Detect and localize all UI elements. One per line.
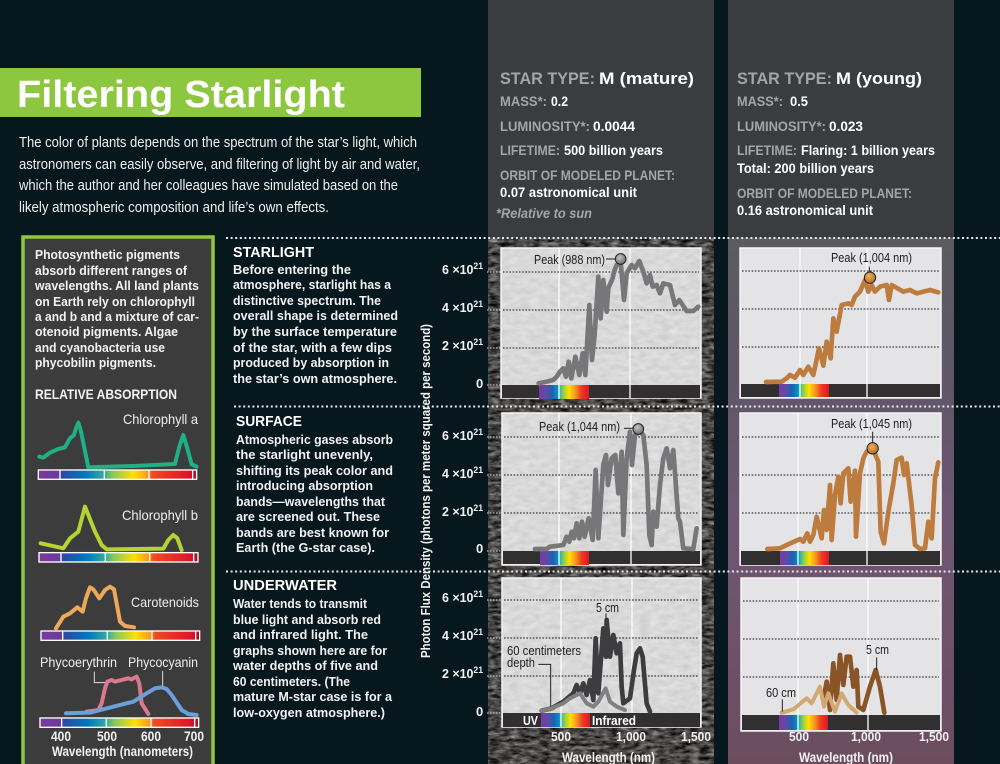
text block: surface: introducing absorption bbox=[236, 478, 373, 493]
text block: underwater: Water tends to transmit bbox=[233, 596, 368, 611]
x axis mature: 500 bbox=[551, 729, 571, 744]
panel: star type M young: Total: 200 billion years bbox=[737, 160, 874, 176]
x axis mature: 1,000 bbox=[616, 729, 646, 744]
title: Filtering Starlight bbox=[17, 74, 345, 116]
panel: star type M mature: LIFETIME: bbox=[500, 142, 560, 158]
y axis labels row 1: 0 bbox=[476, 376, 483, 391]
y axis labels row 1: 2 ×10 bbox=[442, 338, 475, 353]
text block: surface: Earth (the G-star case). bbox=[236, 540, 375, 555]
panel: star type M mature: LUMINOSITY*: bbox=[500, 118, 590, 134]
panel: star type M mature: STAR TYPE: bbox=[500, 69, 595, 88]
chart: young surface bbox=[740, 413, 941, 565]
panel: star type M young: Flaring: 1 billion years bbox=[801, 142, 935, 158]
chart: mature underwater: 5 cm bbox=[596, 600, 619, 615]
text block: surface: shifting its peak color and bbox=[236, 463, 393, 478]
chart: mature underwater: 60 centimeters bbox=[507, 643, 581, 658]
text block: starlight: by the surface temperature bbox=[233, 324, 397, 339]
chart: mature surface bbox=[502, 413, 701, 565]
panel: star type M mature: M (mature) bbox=[599, 69, 694, 88]
chart: mature underwater: Infrared bbox=[592, 713, 636, 728]
y axis labels row 3: 21 bbox=[473, 665, 483, 675]
text block: surface: the starlight unevenly, bbox=[236, 447, 373, 462]
panel: mature M star column bbox=[488, 0, 714, 764]
y axis labels row 1: 6 ×10 bbox=[442, 262, 475, 277]
y axis labels row 2 bbox=[442, 427, 502, 556]
panel: star type M young: 0.023 bbox=[829, 118, 863, 134]
panel: star type M young: 0.5 bbox=[790, 93, 808, 109]
x axis mature bbox=[551, 729, 711, 764]
chart: young underwater: 5 cm bbox=[866, 642, 889, 657]
y axis labels row 2: 21 bbox=[473, 465, 483, 475]
chart: young starlight: Peak (1,004 nm) bbox=[831, 250, 912, 265]
chart: chlorophyll a bbox=[38, 411, 198, 479]
text block: surface: are screened out. These bbox=[236, 509, 380, 524]
chart: chlorophyll b bbox=[39, 507, 198, 562]
panel: star type M young: M (young) bbox=[836, 69, 922, 88]
chart: mature underwater bbox=[502, 578, 701, 728]
text block: starlight bbox=[233, 244, 398, 386]
absorption wavelength axis: 700 bbox=[184, 728, 204, 744]
panel: star type M young bbox=[737, 69, 935, 218]
chart: phycobilins: Phycoerythrin bbox=[40, 654, 117, 670]
chart: young surface: Peak (1,045 nm) bbox=[831, 416, 912, 431]
chart: young starlight bbox=[740, 248, 941, 398]
panel: star type M young: LIFETIME: bbox=[737, 142, 797, 158]
y axis labels row 2: 0 bbox=[476, 541, 483, 556]
text block: surface: SURFACE bbox=[236, 413, 302, 430]
text block: underwater bbox=[232, 577, 393, 720]
chart: phycobilins bbox=[40, 654, 199, 727]
panel: photosynthetic pigments box bbox=[23, 237, 213, 764]
panel: star type M mature: *Relative to sun bbox=[496, 205, 592, 221]
y axis labels row 3: 21 bbox=[473, 627, 483, 637]
panel: star type M young: MASS*: bbox=[737, 93, 783, 109]
y axis labels row 3: 2 ×10 bbox=[442, 666, 475, 681]
pigments text: and cyanobacteria use bbox=[35, 340, 165, 355]
panel: star type M mature bbox=[496, 69, 694, 221]
intro text: The color of plants depends on the spectrum of the star’s light, which bbox=[19, 135, 417, 151]
text block: starlight: STARLIGHT bbox=[233, 244, 314, 261]
chart: mature underwater: UV bbox=[523, 713, 538, 728]
y axis labels row 3: 0 bbox=[476, 704, 483, 719]
y axis labels row 2: 21 bbox=[473, 503, 483, 513]
text block: underwater: mature M-star case is for a bbox=[233, 689, 393, 704]
absorption wavelength axis: 600 bbox=[141, 728, 161, 744]
y axis labels row 2: 4 ×10 bbox=[442, 466, 475, 481]
panel: star type M mature: 500 billion years bbox=[564, 142, 663, 158]
y axis labels row 1: 21 bbox=[473, 337, 483, 347]
chart: mature underwater: depth bbox=[507, 655, 535, 670]
panel: star type M young: 0.16 astronomical unit bbox=[737, 202, 873, 218]
y axis labels row 2: 6 ×10 bbox=[442, 428, 475, 443]
chart: mature starlight: Peak (988 nm) bbox=[534, 252, 605, 267]
intro text: astronomers can easily observe, and filtering of light by air and water, bbox=[19, 157, 420, 173]
text block: starlight: atmosphere, starlight has a bbox=[233, 277, 392, 292]
x axis young: 500 bbox=[789, 729, 809, 744]
y axis title: Photon Flux Density (photons per meter squared per second) bbox=[418, 324, 433, 658]
intro text bbox=[18, 135, 420, 216]
text block: underwater: and infrared light. The bbox=[233, 627, 368, 642]
pigments text: otenoid pigments. Algae bbox=[35, 324, 178, 339]
pigments text: absorb different ranges of bbox=[35, 263, 188, 278]
text block: starlight: the star’s own atmosphere. bbox=[233, 371, 397, 386]
text block: underwater: low-oxygen atmosphere.) bbox=[233, 705, 385, 720]
chart: carotenoids bbox=[41, 587, 200, 640]
x axis mature: 1,500 bbox=[681, 729, 711, 744]
y axis labels row 1: 4 ×10 bbox=[442, 300, 475, 315]
pigments text: wavelengths. All land plants bbox=[34, 278, 199, 293]
text block: starlight: distinctive spectrum. The bbox=[233, 293, 381, 308]
relative absorption heading: RELATIVE ABSORPTION bbox=[35, 386, 177, 402]
pigments text: Photosynthetic pigments bbox=[35, 247, 180, 262]
y axis labels row 3: 4 ×10 bbox=[442, 628, 475, 643]
pigments text: on Earth rely on chlorophyll bbox=[35, 294, 195, 309]
chart: carotenoids: Carotenoids bbox=[131, 594, 199, 610]
chart: chlorophyll a: Chlorophyll a bbox=[123, 411, 198, 427]
text block: starlight: Before entering the bbox=[233, 262, 351, 277]
panel: star type M mature: MASS*: bbox=[500, 93, 547, 109]
panel: young M star column bbox=[728, 0, 954, 764]
text block: starlight: of the star, with a few dips bbox=[233, 340, 392, 355]
x axis young: 1,000 bbox=[851, 729, 881, 744]
panel: star type M mature: 0.07 astronomical unit bbox=[500, 184, 637, 200]
panel: star type M young: ORBIT OF MODELED PLANET: bbox=[737, 185, 912, 201]
y axis labels row 2: 21 bbox=[473, 427, 483, 437]
absorption wavelength axis bbox=[51, 728, 204, 759]
panel: star type M mature: 0.2 bbox=[551, 93, 568, 109]
chart: young underwater: 60 cm bbox=[766, 685, 796, 700]
y axis labels row 3 bbox=[442, 589, 502, 719]
absorption wavelength axis: 500 bbox=[97, 728, 117, 744]
chart: young underwater bbox=[741, 578, 941, 731]
x axis young: 1,500 bbox=[919, 729, 949, 744]
text block: surface: Atmospheric gases absorb bbox=[236, 432, 393, 447]
intro text: which the author and her colleagues have simulated based on the bbox=[18, 178, 398, 194]
y axis labels row 3: 6 ×10 bbox=[442, 590, 475, 605]
chart: mature starlight bbox=[501, 248, 701, 399]
title bbox=[0, 68, 421, 117]
pigments text bbox=[34, 247, 199, 370]
chart: mature surface: Peak (1,044 nm) bbox=[539, 419, 620, 434]
panel: star type M mature: 0.0044 bbox=[593, 118, 635, 134]
text block: underwater: blue light and absorb red bbox=[233, 612, 381, 627]
text block: surface: bands are best known for bbox=[236, 525, 389, 540]
text block: underwater: water depths of five and bbox=[232, 658, 378, 673]
y axis labels row 3: 21 bbox=[473, 589, 483, 599]
y axis labels row 1: 21 bbox=[473, 299, 483, 309]
y axis labels row 2: 2 ×10 bbox=[442, 504, 475, 519]
pigments text: a and b and a mixture of car- bbox=[35, 309, 199, 324]
text block: underwater: 60 centimeters. (The bbox=[233, 674, 350, 689]
intro text: likely atmospheric composition and life’s own effects. bbox=[19, 200, 329, 216]
text block: underwater: UNDERWATER bbox=[233, 577, 337, 594]
text block: underwater: graphs shown here are for bbox=[233, 643, 387, 658]
chart: phycobilins: Phycocyanin bbox=[128, 654, 198, 670]
panel: star type M young: LUMINOSITY*: bbox=[737, 118, 826, 134]
text block: starlight: produced by absorption in bbox=[233, 355, 389, 370]
absorption wavelength axis: Wavelength (nanometers) bbox=[52, 744, 193, 759]
text block: starlight: overall shape is determined bbox=[233, 308, 398, 323]
chart: chlorophyll b: Chlorophyll b bbox=[122, 507, 198, 523]
y axis labels row 1 bbox=[442, 261, 501, 391]
x axis young bbox=[789, 729, 949, 764]
text block: surface bbox=[236, 413, 393, 555]
absorption wavelength axis: 400 bbox=[51, 728, 71, 744]
panel: star type M young: STAR TYPE: bbox=[737, 69, 832, 88]
y axis labels row 1: 21 bbox=[473, 261, 483, 271]
text block: surface: bands—wavelengths that bbox=[236, 494, 386, 509]
pigments text: phycobilin pigments. bbox=[35, 355, 156, 370]
panel: star type M mature: ORBIT OF MODELED PLANET: bbox=[500, 167, 675, 183]
